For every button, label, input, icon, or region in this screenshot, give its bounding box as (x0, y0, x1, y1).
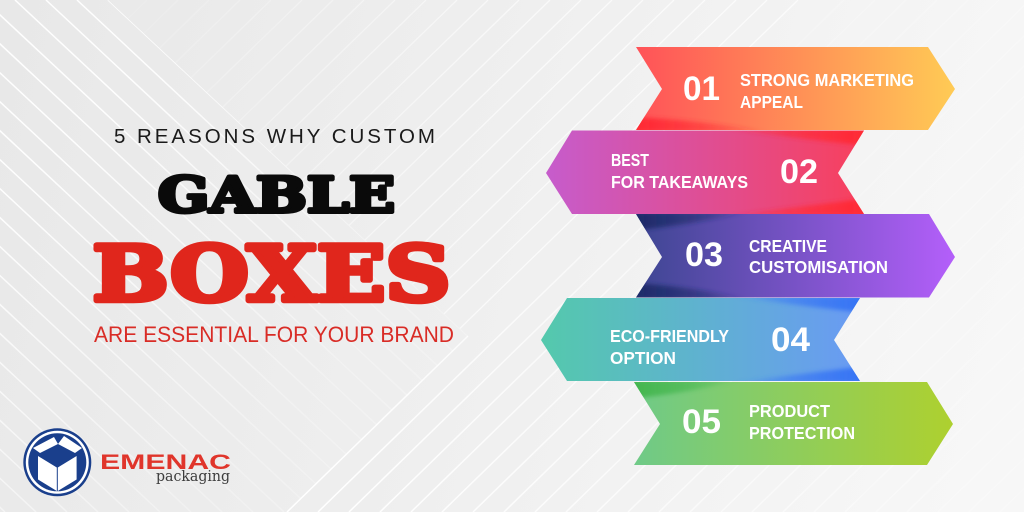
heading: boxes: BOXES (92, 230, 450, 318)
label: APPEAL (740, 92, 803, 112)
label: FOR TAKEAWAYS (611, 172, 748, 192)
number: 01 (683, 70, 720, 108)
logo tagline: packaging (156, 467, 230, 485)
arrow 02: best for takeaways (546, 128, 870, 216)
label: STRONG MARKETING (740, 70, 914, 90)
number: 03 (685, 236, 723, 274)
arrow 04: eco-friendly option (541, 296, 866, 383)
heading: 5 reasons why custom: 5 REASONS WHY CUSTOM (114, 125, 435, 148)
label: PRODUCT (749, 401, 830, 421)
arrow 01: strong marketing appeal (630, 47, 955, 132)
logo: emenac packaging (23, 428, 231, 496)
label (740, 70, 914, 112)
label: CUSTOMISATION (749, 257, 888, 277)
logo wordmark: EMENAC (100, 451, 231, 474)
label (610, 326, 729, 368)
label: PROTECTION (749, 423, 855, 443)
label (611, 150, 748, 192)
number: 02 (780, 153, 818, 191)
label (749, 401, 855, 443)
label: BEST (611, 150, 649, 170)
arrow 03: creative customisation (630, 212, 955, 300)
subheading: are essential for your brand: ARE ESSENTIAL FOR YOUR BRAND (94, 322, 454, 347)
label: CREATIVE (749, 236, 827, 256)
number: 05 (682, 403, 721, 441)
icon: box emblem (23, 428, 91, 496)
label (749, 236, 888, 277)
label: ECO-FRIENDLY (610, 326, 729, 346)
label: OPTION (610, 348, 676, 368)
heading: gable: GABLE (158, 166, 395, 224)
number: 04 (771, 321, 810, 359)
arrow 05: product protection (628, 380, 953, 465)
